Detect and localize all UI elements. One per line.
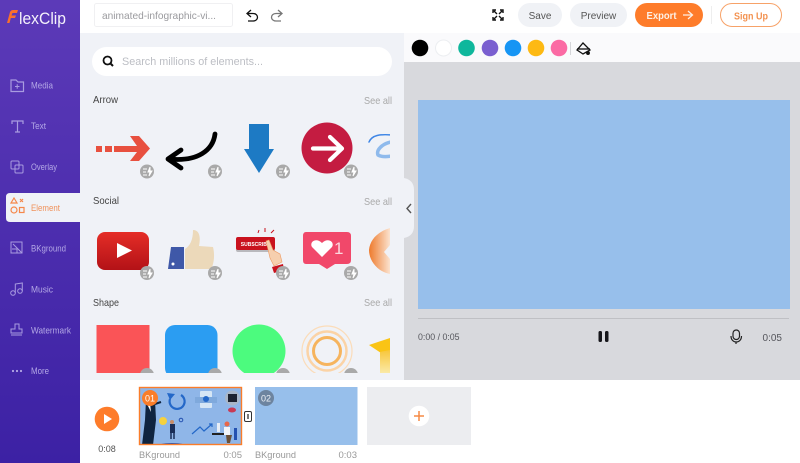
shape: green circle	[232, 324, 286, 378]
icon: pause	[598, 331, 608, 342]
button: Save	[518, 3, 562, 27]
total duration: 0:05	[763, 333, 782, 344]
nav: Watermark: Watermark	[31, 326, 71, 336]
icon: like notification bubble	[303, 232, 351, 269]
panel: canvas area	[404, 33, 800, 380]
panel: timeline	[94, 386, 471, 460]
icon: black curved arrow	[168, 134, 215, 168]
transition marker	[244, 412, 252, 422]
nav: Music: Music	[31, 284, 53, 294]
nav: Overlay: Overlay	[31, 162, 57, 172]
nav: Overlay	[11, 161, 57, 173]
clip 2 duration: 0:03	[338, 450, 357, 461]
nav: Media: Media	[31, 80, 54, 90]
shape: concentric rings	[302, 326, 352, 376]
icon: red dashed arrow	[96, 136, 150, 161]
button: Export	[635, 3, 703, 27]
icon: orange sphere	[369, 228, 390, 274]
total time: 0:08	[98, 444, 116, 454]
nav: Text: Text	[31, 121, 46, 131]
icon: like notification bubble: 1	[334, 239, 343, 258]
icon: subscribe button with hand: SUBSCRIBE	[241, 242, 271, 248]
clip 2 number: 02	[261, 394, 271, 404]
link: see all shapes: See all	[364, 297, 392, 309]
nav: More: More	[31, 366, 49, 376]
nav: BKground	[11, 242, 66, 254]
shape: yellow cone	[369, 338, 390, 376]
icon: thumbs up	[168, 230, 214, 269]
button: Preview	[570, 3, 627, 27]
link: see all arrows: See all	[364, 95, 392, 107]
panel: top bar	[80, 0, 800, 33]
project name field	[94, 4, 232, 26]
nav: Music	[11, 283, 53, 295]
icon: redo	[272, 10, 282, 21]
nav: Element (active)	[6, 193, 80, 222]
colour swatches	[412, 40, 567, 56]
shape: blue rounded square	[165, 325, 218, 378]
panel: sidebar	[0, 0, 80, 463]
nav: Element (active): Element	[31, 203, 60, 213]
clip 2 label: BKground	[255, 450, 296, 461]
nav: More	[12, 366, 49, 376]
clip 1 duration: 0:05	[224, 450, 242, 461]
clip 2 thumbnail	[255, 387, 358, 445]
nav: BKground: BKground	[31, 244, 66, 254]
icon: crimson circle arrow	[302, 122, 352, 174]
button: Export: Export	[646, 11, 677, 22]
button: Preview: Preview	[581, 11, 617, 22]
button: Sign Up: Sign Up	[734, 12, 768, 22]
project name field: animated-infographic-vi...	[102, 11, 216, 22]
clip 1 thumbnail	[139, 387, 242, 451]
icon: blue down arrow	[244, 124, 274, 173]
heading: Social: Social	[93, 195, 119, 207]
nav: Watermark	[11, 324, 71, 336]
icon: video play button	[97, 232, 149, 270]
current time: 0:00 / 0:05	[418, 332, 460, 342]
search bar	[92, 47, 392, 76]
icon: undo	[247, 10, 258, 21]
shape: red square	[96, 325, 150, 378]
icon: paint bucket	[577, 43, 590, 54]
link: see all social: See all	[364, 196, 392, 208]
play button	[95, 407, 119, 431]
heading: Shape: Shape	[93, 297, 119, 309]
add clip button	[367, 387, 471, 445]
icon: fullscreen	[493, 10, 503, 20]
nav: Text	[12, 121, 46, 132]
badges: shape row	[140, 368, 358, 373]
heading: Arrow: Arrow	[93, 94, 118, 106]
collapse handle	[404, 178, 414, 238]
icon: subscribe button with hand	[236, 228, 284, 273]
logo: lexClip	[19, 10, 66, 28]
panel: element library	[80, 33, 404, 382]
button: Sign Up	[720, 4, 782, 26]
icon: blue swoosh	[369, 135, 392, 157]
badges: arrow row	[140, 164, 358, 178]
clip 1 label: BKground	[139, 450, 180, 461]
video preview	[418, 100, 790, 309]
button: Save: Save	[529, 11, 552, 22]
icon: microphone	[731, 330, 742, 344]
nav: Media	[11, 80, 54, 92]
search bar: Search millions of elements...	[122, 56, 263, 68]
shapes row	[96, 324, 390, 373]
badges: social row	[140, 266, 358, 280]
clip 1 number: 01	[145, 394, 155, 404]
